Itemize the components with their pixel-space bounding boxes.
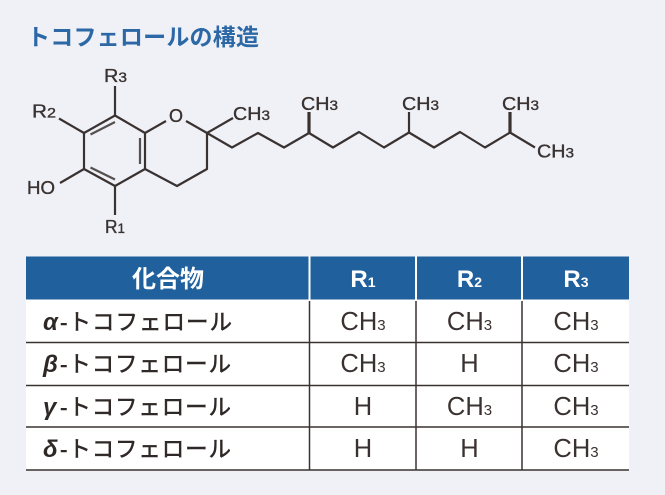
row: delta-tocopherol <box>43 435 599 463</box>
table header: R3 <box>563 266 589 293</box>
compound table <box>26 256 629 470</box>
row: beta-tocopherol: -トコフェロール <box>60 352 231 377</box>
row: alpha-tocopherol: CH3 <box>340 308 386 336</box>
row: alpha-tocopherol <box>43 308 599 336</box>
row: delta-tocopherol: H <box>460 435 479 463</box>
row: delta-tocopherol: CH3 <box>553 435 599 463</box>
row: gamma-tocopherol: CH3 <box>553 393 599 421</box>
row: alpha-tocopherol: CH3 <box>553 308 599 336</box>
chemical structure diagram <box>27 66 574 237</box>
table body background <box>26 299 629 470</box>
row: gamma-tocopherol <box>43 393 599 421</box>
atom label: CH3 on ring: CH3 <box>233 104 270 124</box>
table header: 化合物 <box>132 266 204 293</box>
row: gamma-tocopherol: CH3 <box>447 393 492 421</box>
row: gamma-tocopherol: H <box>354 393 372 421</box>
row: alpha-tocopherol: -トコフェロール <box>60 310 232 335</box>
row: beta-tocopherol: H <box>460 350 479 378</box>
atom label: O: O <box>169 106 183 126</box>
row: delta-tocopherol: δ <box>43 436 58 463</box>
table header <box>26 256 629 300</box>
row: alpha-tocopherol: α <box>43 309 59 336</box>
row: alpha-tocopherol: CH3 <box>447 308 492 336</box>
row: beta-tocopherol: CH3 <box>340 350 386 378</box>
table grid lines <box>26 301 629 470</box>
title: トコフェロールの構造 <box>27 24 259 50</box>
atom label: R3: R3 <box>104 66 127 86</box>
row: beta-tocopherol <box>42 350 599 378</box>
atom label: CH3 branch 2: CH3 <box>402 94 439 114</box>
row: delta-tocopherol: -トコフェロール <box>60 437 231 462</box>
atom label: CH3 branch 1: CH3 <box>301 94 338 114</box>
atom label: CH3 terminal: CH3 <box>537 142 574 162</box>
table header: R2 <box>457 266 482 293</box>
row: gamma-tocopherol: -トコフェロール <box>60 395 231 420</box>
table header: R1 <box>350 266 376 293</box>
atom label: CH3 branch 3: CH3 <box>502 94 539 114</box>
isoprenoid side chain <box>207 112 535 148</box>
row: beta-tocopherol: CH3 <box>553 350 599 378</box>
chromanol ring skeleton <box>59 86 207 215</box>
atom label: R1: R1 <box>105 217 125 237</box>
atom label: HO: HO <box>27 178 55 198</box>
row: delta-tocopherol: H <box>354 435 372 463</box>
row: beta-tocopherol: β <box>42 351 58 378</box>
row: gamma-tocopherol: γ <box>43 394 58 421</box>
atom label: R2: R2 <box>32 102 56 122</box>
